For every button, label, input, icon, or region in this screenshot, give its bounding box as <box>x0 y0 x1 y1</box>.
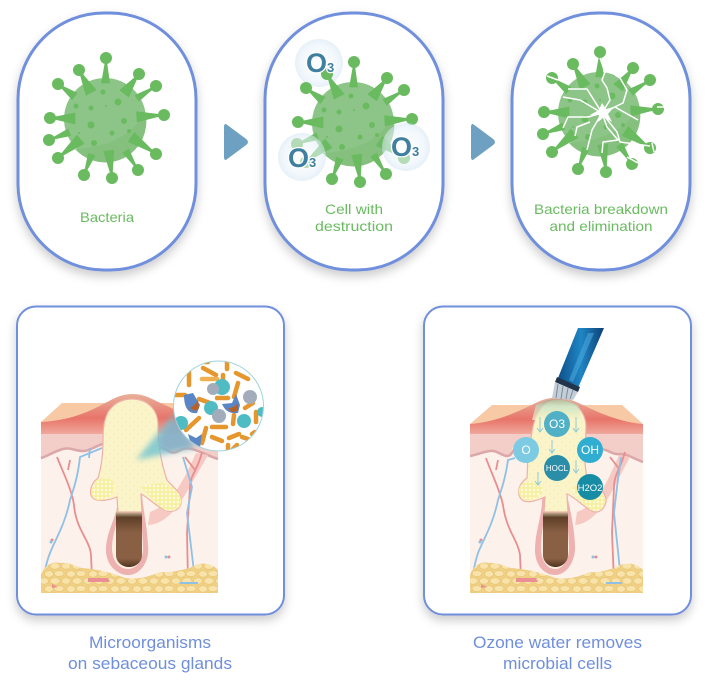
molecule: OH: OH <box>581 443 599 457</box>
skin diagram: ozone treatment <box>470 328 643 593</box>
caption: microorganisms <box>68 634 232 673</box>
icon: ozone bubble top <box>295 39 343 87</box>
caption: ozone water: microbial cells <box>503 655 612 673</box>
flow arrows <box>535 417 579 485</box>
panel: breakdown and elimination <box>512 13 690 270</box>
caption: microorganisms: Microorganisms <box>89 634 211 652</box>
ozone label top: O3 <box>306 48 334 78</box>
panel: ozone water card <box>424 306 691 614</box>
caption: microorganisms: on sebaceous glands <box>68 655 232 673</box>
hair follicle <box>106 494 148 575</box>
ozone device <box>552 328 604 400</box>
molecule: H2O2 <box>577 474 603 500</box>
molecule: OH <box>577 437 603 463</box>
panel: microorganisms card <box>17 306 284 614</box>
gland <box>91 399 181 512</box>
crack burst <box>590 103 614 122</box>
gland <box>519 399 606 512</box>
caption: ozone water <box>473 634 642 673</box>
icon: broken bacteria <box>537 46 665 178</box>
label: cell with destruction: destruction <box>315 218 393 234</box>
molecule: O <box>513 437 539 463</box>
label: cell with destruction: Cell with <box>325 201 383 217</box>
teal magnifier beam <box>136 416 196 460</box>
panel: bacteria <box>18 13 196 270</box>
icon: bacteria under attack <box>291 56 418 188</box>
caption: ozone water: Ozone water removes <box>473 634 642 652</box>
molecule: O: O <box>521 443 531 457</box>
blood vessels <box>472 452 625 590</box>
hair follicle <box>535 494 575 575</box>
fat layer <box>41 563 218 593</box>
molecule: HOCL <box>544 455 570 481</box>
icon: ozone bubble left <box>278 133 326 181</box>
label: bacteria: Bacteria <box>80 209 134 225</box>
ozone label left: O3 <box>288 143 316 173</box>
label: breakdown and elimination: Bacteria breakdown <box>534 201 668 217</box>
icon: bacteria <box>43 52 170 184</box>
arrow: step one to two <box>224 125 248 159</box>
arrow: step two to three <box>472 125 494 159</box>
label: breakdown and elimination: and elimination <box>550 218 652 234</box>
molecule: H2O2: H2O2 <box>578 483 602 494</box>
fat layer <box>470 563 643 593</box>
magnified microorganisms <box>174 361 267 451</box>
ozone label right: O3 <box>391 132 419 162</box>
icon: ozone bubble right <box>382 123 430 171</box>
skin diagram: sebaceous gland <box>41 361 267 593</box>
blood vessels <box>44 448 202 590</box>
molecule: HOCL: HOCL <box>546 464 569 473</box>
hair <box>543 510 568 567</box>
label: cell with destruction <box>315 201 393 234</box>
molecule: O3: O3 <box>549 417 565 431</box>
panel: cell with destruction <box>265 13 443 270</box>
molecule: O3 <box>544 411 570 437</box>
hair <box>116 510 142 567</box>
label: breakdown and elimination <box>534 201 668 234</box>
